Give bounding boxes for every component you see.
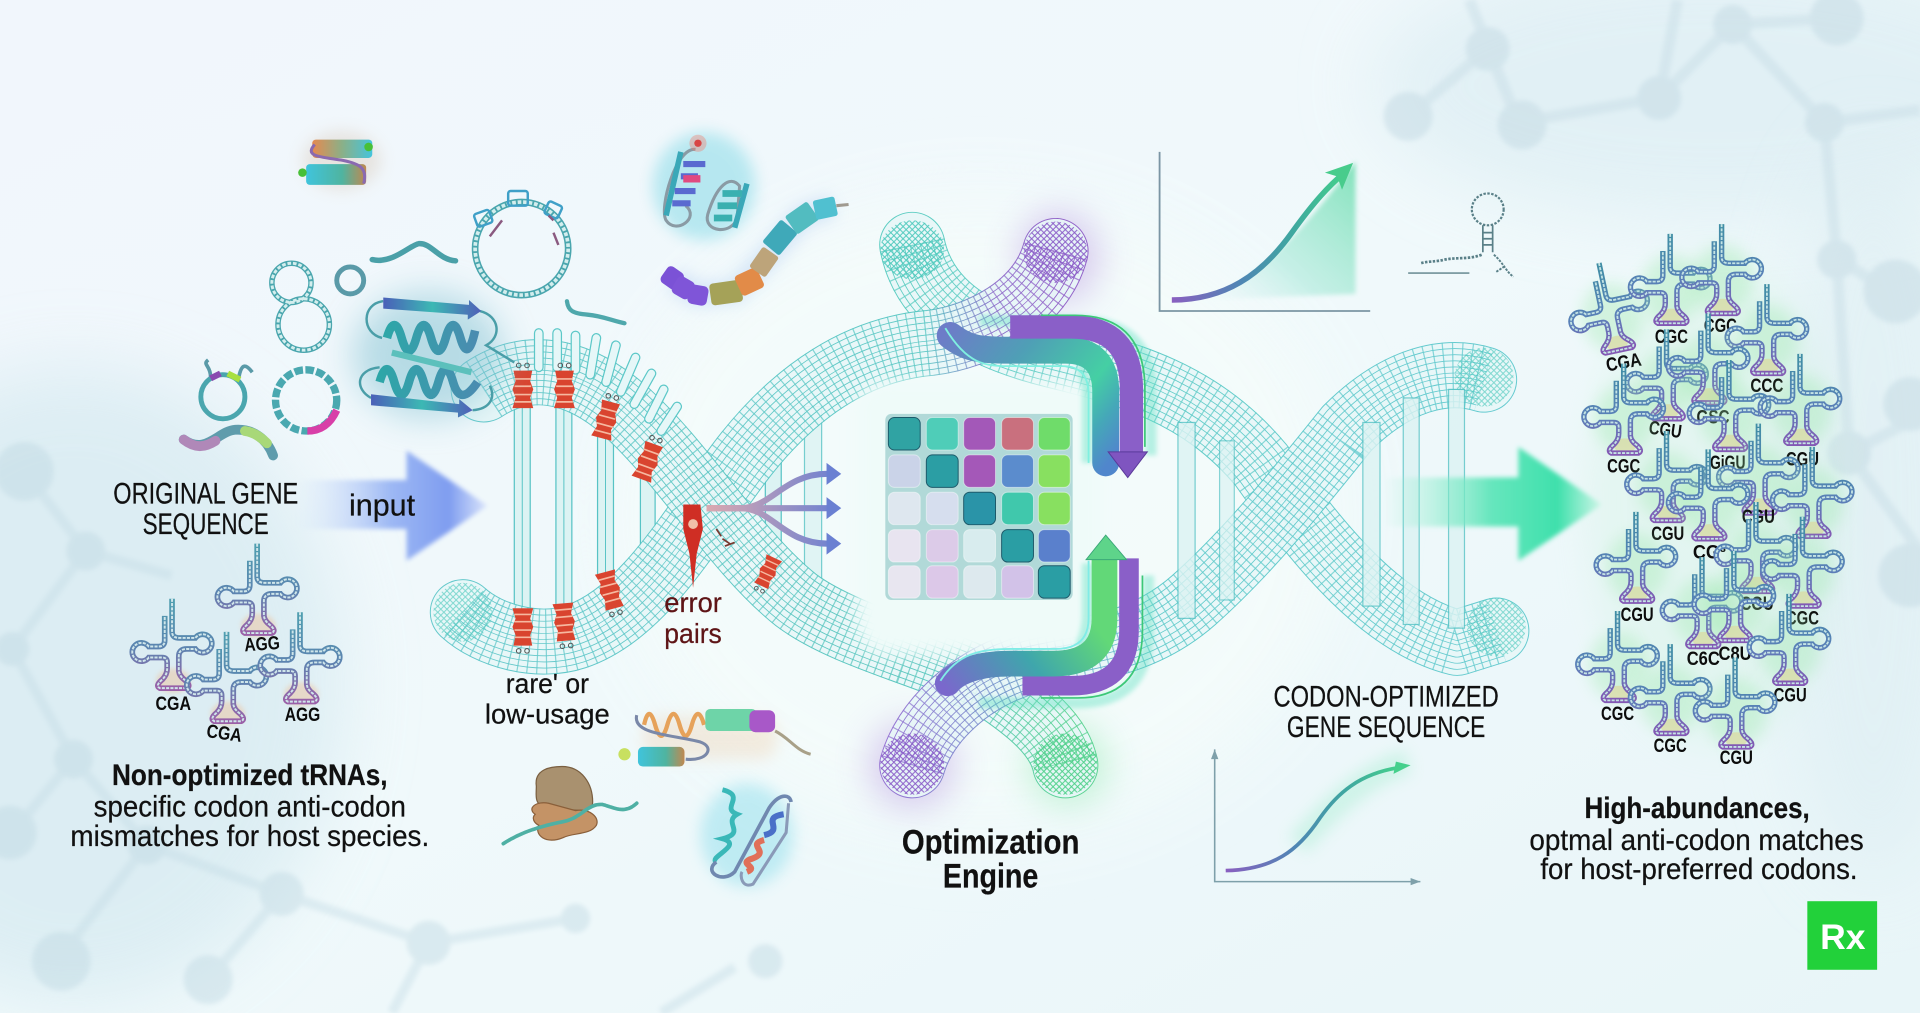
background molecule network, top right <box>1384 0 1920 607</box>
left tRNA group <box>132 544 340 747</box>
red error pair spike at crossover <box>683 504 735 588</box>
DNA helix strand B <box>463 251 1056 642</box>
hairpin protein top <box>653 132 756 240</box>
DNA helix strand A <box>912 245 1496 643</box>
heading: non-optimized tRNAs: mismatches for host species. <box>70 820 429 853</box>
label: error pairs: error <box>664 587 722 618</box>
Rx badge <box>1807 901 1877 970</box>
red error markers <box>512 363 782 653</box>
output arrow <box>1381 447 1602 561</box>
figure eight rings <box>272 263 329 350</box>
left tRNA group: CGA <box>156 694 191 715</box>
right high-abundance tRNA cluster: C8U <box>1719 644 1752 665</box>
bottom right growth chart <box>1211 749 1420 885</box>
label: original gene sequence: SEQUENCE <box>143 508 269 541</box>
heading: high-abundances: optmal anti-codon matches <box>1529 824 1864 857</box>
top right growth chart <box>1160 152 1370 311</box>
heading: non-optimized tRNAs: specific codon anti-codon <box>94 791 406 824</box>
heading: non-optimized tRNAs: Non-optimized tRNAs, <box>112 759 388 792</box>
codon matrix panel <box>885 414 1073 600</box>
Rx badge: Rx <box>1820 917 1866 957</box>
label: input: input <box>349 488 416 522</box>
right high-abundance tRNA cluster: CGU <box>1651 524 1684 545</box>
label: rare or low-usage: rare' or <box>506 668 589 699</box>
RNA tail <box>567 301 624 323</box>
right high-abundance tRNA cluster: CGC <box>1601 704 1634 725</box>
heading: optimization engine: Engine <box>943 858 1038 896</box>
label: rare or low-usage: low-usage <box>485 699 610 730</box>
hairpin protein bottom <box>700 784 793 887</box>
right high-abundance tRNA cluster: CGA <box>1604 350 1643 376</box>
label: error pairs: pairs <box>664 618 722 649</box>
heading: optimization engine: Optimization <box>902 823 1079 861</box>
right high-abundance tRNA cluster: CGC <box>1655 327 1688 348</box>
DNA helix rungs right <box>1178 389 1464 628</box>
left tRNA group: AGG <box>244 633 281 656</box>
multicolor ribbon <box>184 430 273 456</box>
left tRNA group: AGG <box>285 705 320 726</box>
label: codon-optimized gene sequence: GENE SEQUENCE <box>1287 711 1485 744</box>
meshed tube openings <box>433 220 1526 795</box>
large plasmid ring <box>473 191 568 295</box>
segmented beaded chain <box>659 196 849 306</box>
tiny beta protein icon <box>298 131 381 190</box>
ribosome blob with mRNA <box>503 767 637 844</box>
right high-abundance tRNA cluster: CGC <box>1607 457 1640 478</box>
label: codon-optimized gene sequence: CODON-OPTIMIZED <box>1273 681 1499 714</box>
green glow behind high abundance tRNA cluster <box>1586 257 1843 747</box>
right high-abundance tRNA cluster: CGU <box>1742 507 1775 528</box>
short RNA squiggle <box>372 244 456 261</box>
right high-abundance tRNA cluster: CGU <box>1786 449 1819 470</box>
rainbow helix protein <box>618 709 811 767</box>
comb fingers on helix crest <box>539 333 677 431</box>
right high-abundance tRNA cluster: GSC <box>1697 408 1730 429</box>
central white glow behind matrix <box>857 382 1102 654</box>
right high-abundance tRNA cluster: CGC <box>1786 608 1819 629</box>
DNA helix strand C <box>484 372 1065 765</box>
ring with magenta segment <box>276 370 337 431</box>
right high-abundance tRNA cluster: CG³ <box>1693 542 1726 563</box>
top optimization arrow <box>945 315 1151 478</box>
right high-abundance tRNA cluster: CGU <box>1720 748 1753 769</box>
right high-abundance tRNA cluster: CGU <box>1647 418 1683 443</box>
right high-abundance tRNA cluster: CGU <box>1621 605 1654 626</box>
DNA helix rungs left <box>514 404 822 618</box>
bottom optimization arrow <box>940 535 1149 703</box>
heading: high-abundances: for host-preferred codons. <box>1540 853 1858 886</box>
ring with dangling ends <box>201 360 252 419</box>
label: original gene sequence: ORIGINAL GENE <box>113 477 298 510</box>
right high-abundance tRNA cluster: CGC <box>1704 316 1737 337</box>
RNA hairpin icon <box>1408 193 1513 277</box>
right high-abundance tRNA cluster: CGU <box>1741 594 1774 615</box>
right high-abundance tRNA cluster: CGU <box>1774 686 1807 707</box>
right high-abundance tRNA cluster: CGC <box>1654 736 1687 757</box>
right high-abundance tRNA cluster: GiGU <box>1710 453 1745 474</box>
background molecule network, bottom left <box>0 442 782 1013</box>
left tRNA group: CGA <box>205 721 243 747</box>
input arrow <box>294 451 487 561</box>
right high-abundance tRNA cluster: C6C <box>1687 649 1720 670</box>
right high-abundance tRNA cluster: CCC <box>1750 376 1784 397</box>
folded protein with helices <box>353 291 514 419</box>
heading: high-abundances: High-abundances, <box>1584 792 1810 825</box>
small ring <box>337 267 364 294</box>
right high-abundance tRNA cluster <box>1560 224 1852 769</box>
branching arrows from error site <box>707 463 841 555</box>
glows around tube ends <box>868 211 1109 809</box>
DNA helix strand D <box>912 375 1484 765</box>
